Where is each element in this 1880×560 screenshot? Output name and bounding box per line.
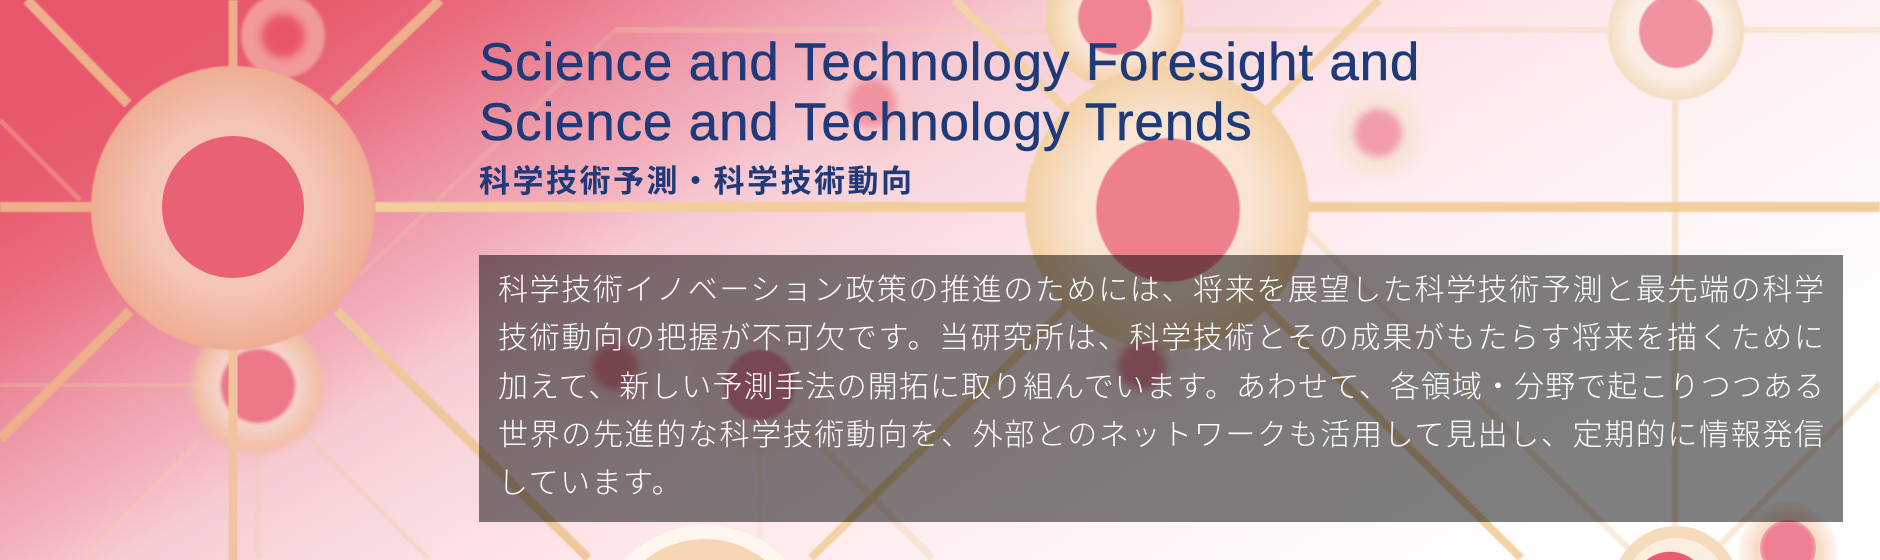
node: bottom far right xyxy=(1738,502,1838,560)
node: blurred top-left small xyxy=(241,0,325,78)
title: Science and Technology Foresight and xyxy=(479,33,1420,92)
node: lower-left medium xyxy=(192,320,324,560)
description text: 世界の先進的な科学技術動向を、外部とのネットワークも活用して見出し、定期的に情報発信 xyxy=(498,419,1824,452)
description text xyxy=(498,274,1824,500)
node: behind panel left xyxy=(692,317,828,453)
node: top centre xyxy=(1046,0,1184,87)
subtitle: 科学技術予測・科学技術動向 xyxy=(479,164,914,199)
title xyxy=(479,33,1420,152)
node: bottom right xyxy=(1620,526,1732,560)
description text: 科学技術イノベーション政策の推進のためには、将来を展望した科学技術予測と最先端の科学 xyxy=(498,274,1824,307)
panel: description xyxy=(479,255,1843,522)
node: large centre xyxy=(1025,66,1309,350)
node: main large left xyxy=(91,66,375,350)
node: blurred right of title xyxy=(1336,91,1420,175)
node: behind panel far left xyxy=(573,325,657,409)
description text: しています。 xyxy=(498,467,683,500)
node: bottom centre xyxy=(624,525,786,560)
node: behind panel centre xyxy=(1100,324,1184,408)
description text: 加えて、新しい予測手法の開拓に取り組んでいます。あわせて、各領域・分野で起こりつつある xyxy=(498,371,1824,404)
node: top right xyxy=(1608,0,1744,100)
node: blurred behind title xyxy=(824,55,920,151)
title: Science and Technology Trends xyxy=(479,93,1253,152)
description text: 技術動向の把握が不可欠です。当研究所は、科学技術とその成果がもたらす将来を描くために xyxy=(498,322,1824,355)
